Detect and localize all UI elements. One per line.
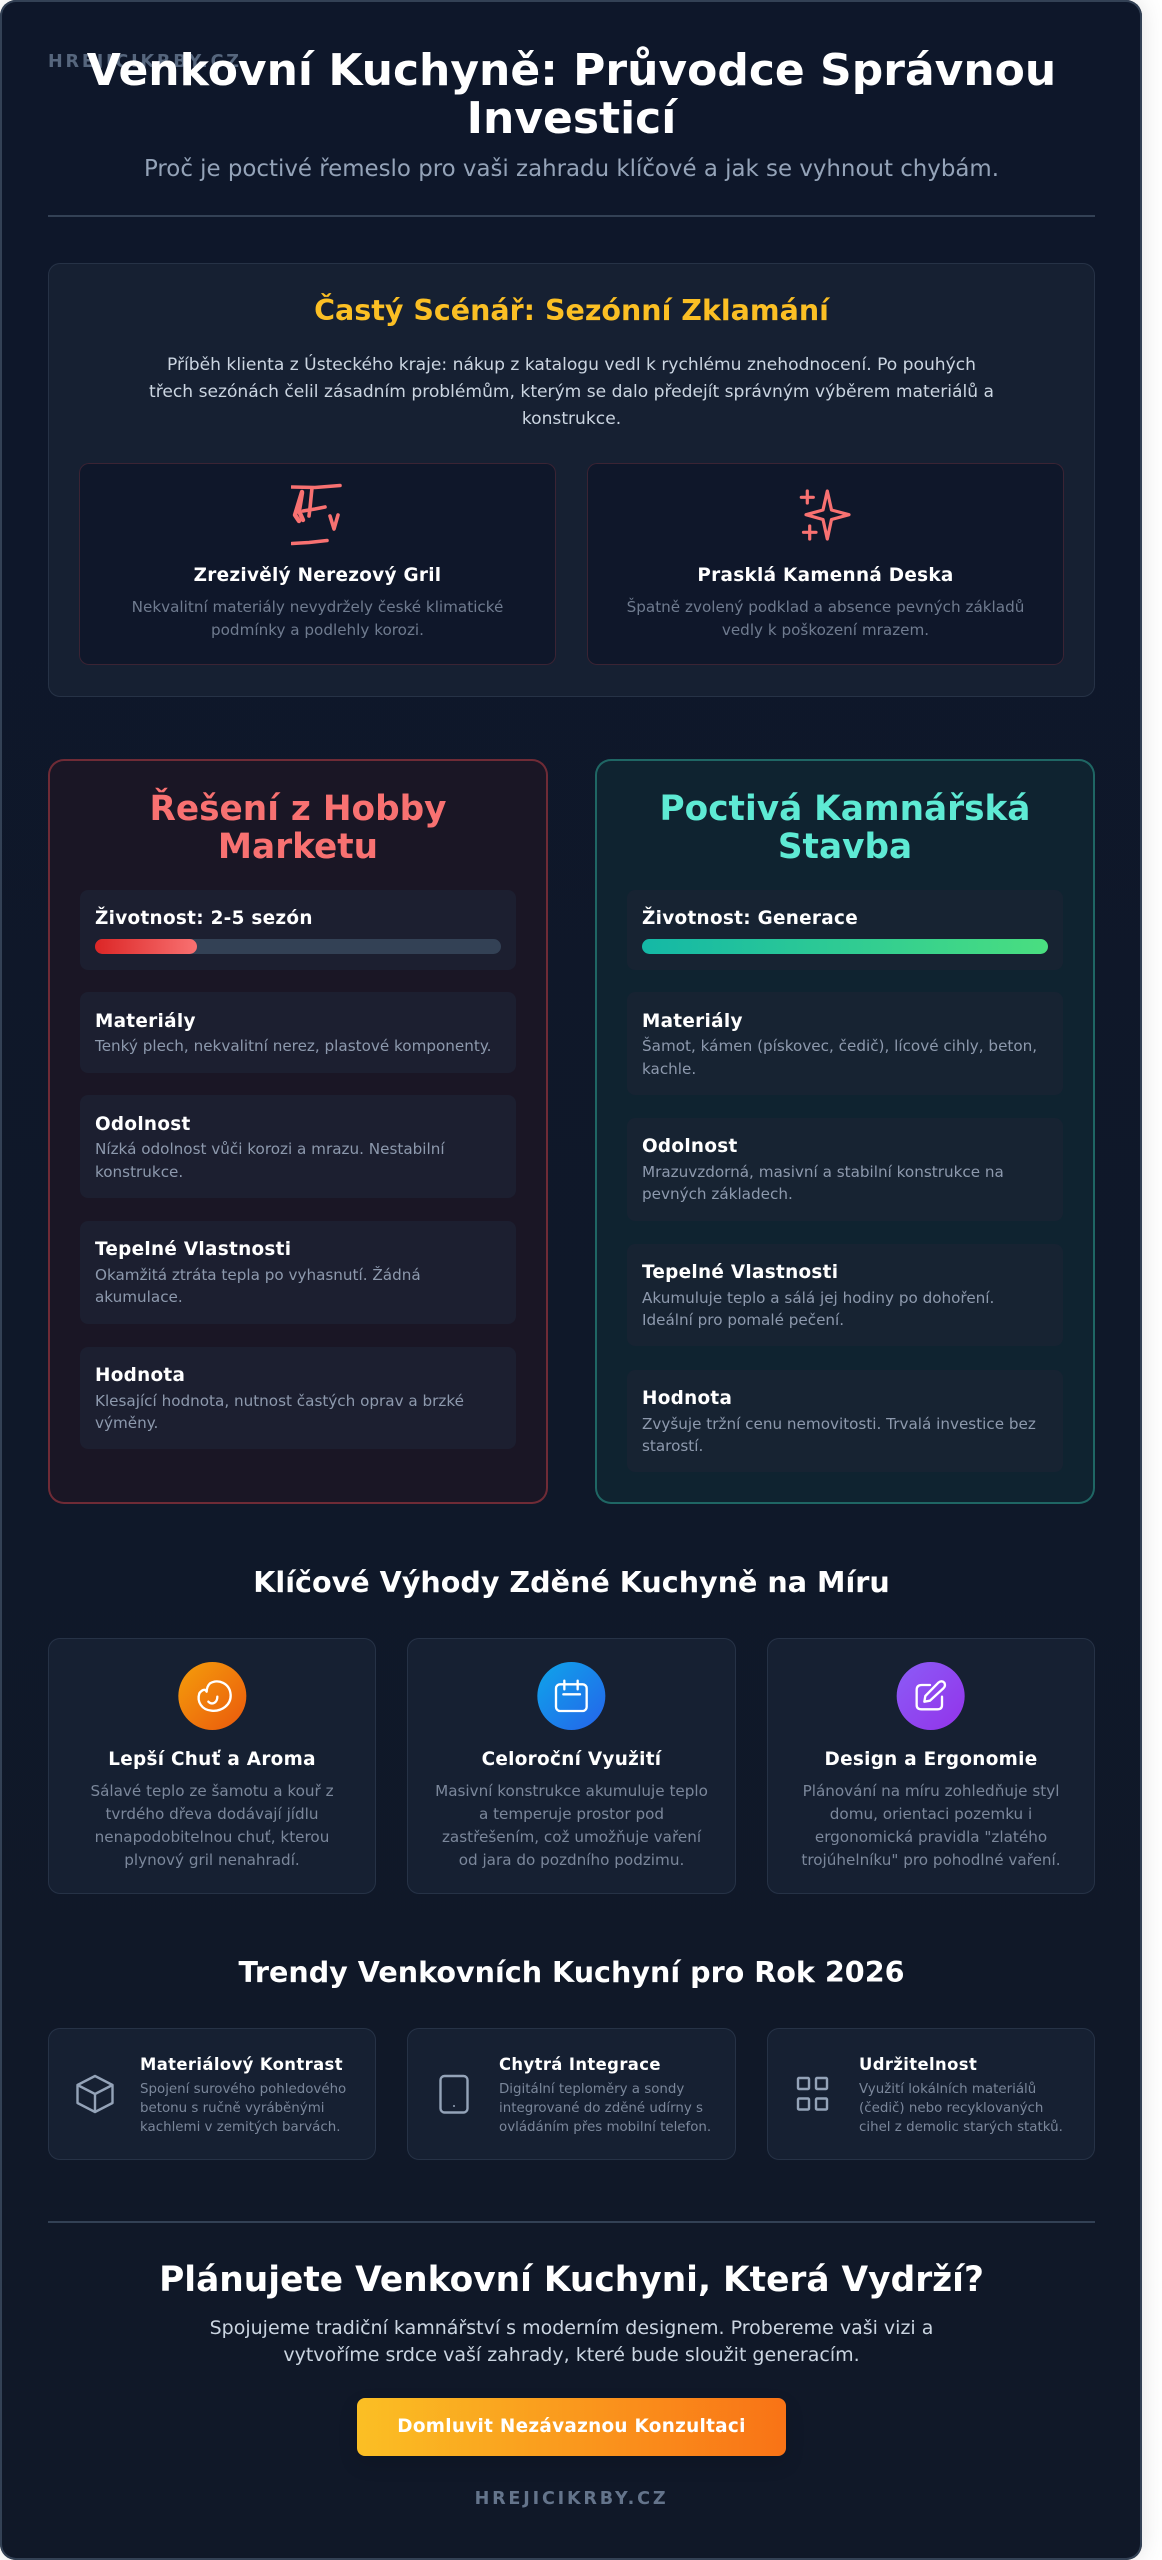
card title: Chytrá Integrace xyxy=(499,2055,661,2074)
icon: calendar in blue circle xyxy=(537,1662,606,1730)
panel: hobby market solution xyxy=(48,759,548,1504)
row text: Zvyšuje tržní cenu nemovitosti. Trvalá investice bez xyxy=(642,1414,1036,1432)
card text: Špatně zvolený podklad a absence pevných základů xyxy=(627,598,1024,616)
card text: kachlemi v zemitých barvách. xyxy=(140,2120,340,2135)
footer brand: HREJICIKRBY.CZ xyxy=(475,2489,668,2509)
row: thermal: Tepelné Vlastnosti xyxy=(642,1262,838,1283)
row text: Okamžitá ztráta tepla po vyhasnutí. Žádná xyxy=(95,1266,421,1284)
column heading: Poctivá Kamnářská xyxy=(660,789,1030,829)
trends heading: Trendy Venkovních Kuchyní pro Rok 2026 xyxy=(238,1955,904,1989)
row: thermal xyxy=(627,1244,1063,1346)
card text: integrované do zděné udírny s xyxy=(499,2101,703,2116)
row: materials xyxy=(627,992,1063,1095)
card: design xyxy=(767,1638,1095,1894)
card: smart integration xyxy=(407,2028,736,2160)
card text: betonu s ručně vyráběnými xyxy=(140,2101,324,2116)
icon: phone xyxy=(439,2074,469,2114)
scenario heading: Častý Scénář: Sezónní Zklamání xyxy=(314,294,829,327)
scenario text xyxy=(149,354,994,428)
card text xyxy=(859,2082,1063,2135)
card text: ovládáním přes mobilní telefon. xyxy=(499,2120,711,2135)
card text: Spojení surového pohledového xyxy=(140,2082,346,2097)
card title: Zrezivělý Nerezový Gril xyxy=(194,565,441,586)
card text xyxy=(90,1782,334,1869)
row text: Mrazuvzdorná, masivní a stabilní konstrukce na xyxy=(642,1162,1004,1180)
row: materials xyxy=(80,992,516,1073)
button xyxy=(357,2398,786,2456)
card title: Design a Ergonomie xyxy=(825,1749,1037,1770)
row text: výměny. xyxy=(95,1414,158,1432)
row: resistance: Odolnost xyxy=(642,1136,738,1157)
column heading xyxy=(660,789,1030,867)
row: materials: Materiály xyxy=(95,1011,196,1032)
card text xyxy=(132,598,503,639)
title: Venkovní Kuchyně: Průvodce Správnou xyxy=(87,45,1056,96)
row text: starostí. xyxy=(642,1437,703,1455)
panel: common scenario xyxy=(48,263,1095,697)
scenario text: konstrukce. xyxy=(522,408,621,428)
title xyxy=(87,45,1056,144)
icon: cube xyxy=(76,2074,114,2114)
row text: konstrukce. xyxy=(95,1163,183,1181)
card text xyxy=(435,1782,708,1869)
call to action text: Spojujeme tradiční kamnářství s moderním designem. Probereme vaši vizi a xyxy=(210,2317,933,2339)
row text xyxy=(642,1036,1037,1078)
subtitle: Proč je poctivé řemeslo pro vaši zahradu klíčové a jak se vyhnout chybám. xyxy=(144,156,999,182)
icon: grid xyxy=(796,2076,828,2111)
row text xyxy=(95,1392,464,1432)
card: cracked stone top xyxy=(587,463,1064,665)
row text: Šamot, kámen (pískovec, čedič), lícové cihly, beton, xyxy=(642,1037,1037,1055)
lifespan meter xyxy=(80,890,516,970)
lifespan meter xyxy=(627,890,1063,970)
title: Investicí xyxy=(467,93,676,144)
row text: Klesající hodnota, nutnost častých oprav a brzké xyxy=(95,1392,464,1410)
card text: od jara do pozdního podzimu. xyxy=(459,1851,684,1869)
card text xyxy=(499,2082,711,2135)
card title: Celoroční Využití xyxy=(482,1749,661,1770)
column heading: Marketu xyxy=(218,827,378,867)
card text xyxy=(627,598,1024,639)
card text: tvrdého dřeva dodávají jídlu xyxy=(105,1805,319,1823)
card text xyxy=(140,2082,346,2135)
icon: pencil in purple circle xyxy=(896,1662,965,1730)
card: rusty grill xyxy=(79,463,556,665)
row: thermal xyxy=(80,1221,516,1324)
icon: flame in orange circle xyxy=(178,1662,246,1730)
card: sustainability xyxy=(767,2028,1095,2160)
card text: Plánování na míru zohledňuje styl xyxy=(803,1782,1059,1800)
row text xyxy=(642,1162,1004,1203)
row text xyxy=(95,1266,421,1306)
row: materials: Materiály xyxy=(642,1011,743,1032)
row text: pevných základech. xyxy=(642,1185,793,1203)
card text: Digitální teploměry a sondy xyxy=(499,2082,684,2097)
button: Domluvit Nezávaznou Konzultaci xyxy=(397,2416,746,2437)
card text: Využití lokálních materiálů xyxy=(859,2082,1036,2097)
card title: Prasklá Kamenná Deska xyxy=(697,565,954,586)
watermark top: HREJICIKRBY.CZ xyxy=(48,52,242,72)
card title: Udržitelnost xyxy=(859,2055,977,2074)
scenario text: třech sezónách čelil zásadním problémům, kterým se dalo předejít správným výběrem materiálů a xyxy=(149,382,994,402)
row text: akumulace. xyxy=(95,1288,183,1306)
row: value: Hodnota xyxy=(95,1365,185,1386)
card text: a temperuje prostor pod xyxy=(479,1805,664,1823)
lifespan bar xyxy=(95,939,501,954)
call to action text: vytvoříme srdce vaší zahrady, které bude sloužit generacím. xyxy=(283,2344,860,2366)
card text: cihel z demolic starých statků. xyxy=(859,2120,1063,2135)
scenario text: Příběh klienta z Ústeckého kraje: nákup z katalogu vedl k rychlému znehodnocení. Po pouhých xyxy=(167,354,976,374)
card text: zastřešením, což umožňuje vaření xyxy=(442,1828,701,1846)
card text: trojúhelníku" pro pohodlné vaření. xyxy=(801,1851,1061,1869)
card text: Masivní konstrukce akumuluje teplo xyxy=(435,1782,708,1800)
card text xyxy=(801,1782,1061,1869)
card text: Nekvalitní materiály nevydržely české klimatické xyxy=(132,598,503,616)
icon: rusty grill xyxy=(291,484,342,546)
card text: Sálavé teplo ze šamotu a kouř z xyxy=(90,1782,334,1800)
card title: Materiálový Kontrast xyxy=(140,2055,343,2074)
card text: vedly k poškození mrazem. xyxy=(722,621,929,639)
card text: nenapodobitelnou chuť, kterou xyxy=(95,1828,329,1846)
panel: masonry build xyxy=(595,759,1095,1504)
card text: ergonomická pravidla "zlatého xyxy=(815,1828,1047,1846)
benefits heading: Klíčové Výhody Zděné Kuchyně na Míru xyxy=(253,1565,890,1599)
column heading: Stavba xyxy=(778,827,912,867)
lifespan label: Životnost: Generace xyxy=(642,908,858,929)
row: resistance xyxy=(80,1095,516,1198)
row: value xyxy=(627,1370,1063,1472)
row: resistance: Odolnost xyxy=(95,1114,191,1135)
card text: podmínky a podlehly korozi. xyxy=(211,621,424,639)
icon: cracks xyxy=(800,489,851,541)
row text: kachle. xyxy=(642,1060,696,1078)
card: year-round use xyxy=(407,1638,736,1894)
row text: Akumuluje teplo a sálá jej hodiny po dohoření. xyxy=(642,1288,994,1306)
lifespan label: Životnost: 2-5 sezón xyxy=(95,908,313,929)
card: material contrast xyxy=(48,2028,376,2160)
row: resistance xyxy=(627,1118,1063,1221)
column heading xyxy=(149,788,447,867)
row text xyxy=(95,1140,445,1181)
row: value: Hodnota xyxy=(642,1388,732,1409)
call to action text xyxy=(210,2317,933,2366)
row text: Ideální pro pomalé pečení. xyxy=(642,1311,844,1329)
column heading: Řešení z Hobby xyxy=(149,789,447,829)
card text: plynový gril nenahradí. xyxy=(124,1851,300,1869)
row text: Nízká odolnost vůči korozi a mrazu. Nestabilní xyxy=(95,1140,445,1158)
row text xyxy=(642,1414,1036,1455)
row: thermal: Tepelné Vlastnosti xyxy=(95,1239,291,1260)
card text: domu, orientaci pozemku i xyxy=(830,1805,1032,1823)
call to action heading: Plánujete Venkovní Kuchyni, Která Vydrží? xyxy=(159,2260,984,2300)
row text xyxy=(642,1288,994,1329)
row text: Tenký plech, nekvalitní nerez, plastové komponenty. xyxy=(95,1037,492,1055)
card: taste xyxy=(48,1638,376,1894)
card text: (čedič) nebo recyklovaných xyxy=(859,2101,1043,2116)
row: value xyxy=(80,1347,516,1449)
lifespan bar xyxy=(642,939,1048,954)
card title: Lepší Chuť a Aroma xyxy=(108,1749,316,1770)
